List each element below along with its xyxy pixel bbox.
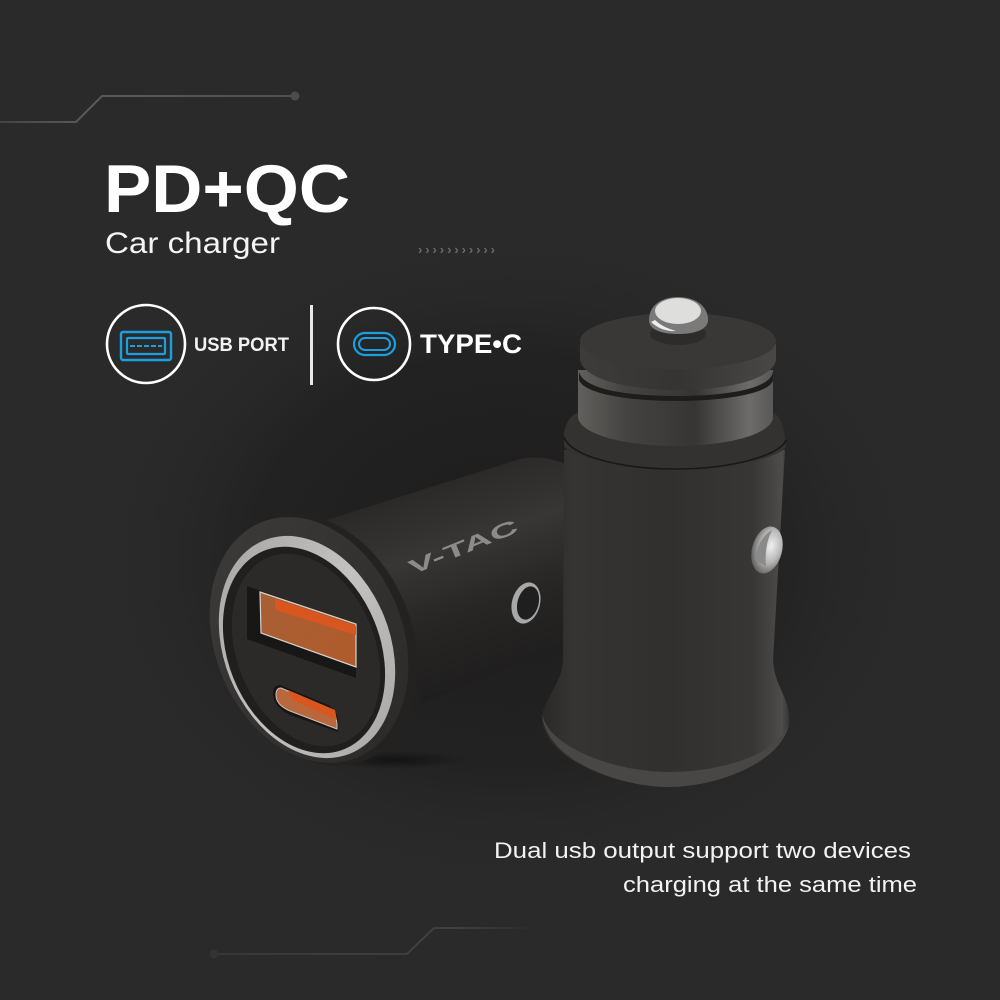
light ring — [187, 509, 427, 785]
chevron row: ››››››››››› — [418, 242, 495, 257]
cap — [580, 344, 776, 390]
divider — [310, 305, 313, 385]
shadow — [325, 751, 465, 769]
right charger — [542, 297, 789, 787]
shoulder line — [564, 437, 786, 469]
icon: type-c port — [338, 308, 410, 380]
side button — [746, 523, 788, 577]
left charger — [174, 458, 575, 796]
shoulder — [564, 412, 786, 468]
type-c badge — [338, 308, 522, 380]
caption — [494, 838, 917, 897]
tip — [649, 297, 708, 345]
main body — [542, 450, 789, 787]
logo: V-TAC — [406, 516, 521, 580]
dark glow behind products — [80, 220, 940, 900]
subtitle: Car charger — [105, 227, 280, 260]
label: type-c: TYPE•C — [420, 329, 522, 359]
label: usb port: USB PORT — [194, 335, 289, 356]
front flange — [178, 484, 454, 796]
body — [327, 458, 575, 704]
groove — [579, 372, 773, 401]
usb-c port — [273, 685, 339, 732]
circuit line top — [0, 92, 300, 122]
base edge — [542, 714, 789, 787]
usb-a port — [247, 586, 356, 678]
caption: charging at the same time — [623, 872, 917, 897]
button — [507, 579, 545, 627]
title: PD+QC — [104, 151, 350, 227]
icon: usb port — [107, 305, 185, 383]
inner face — [193, 522, 415, 778]
circuit line bottom — [210, 928, 530, 958]
neck — [578, 370, 773, 446]
usb port badge — [107, 305, 289, 383]
caption: Dual usb output support two devices — [494, 838, 911, 863]
